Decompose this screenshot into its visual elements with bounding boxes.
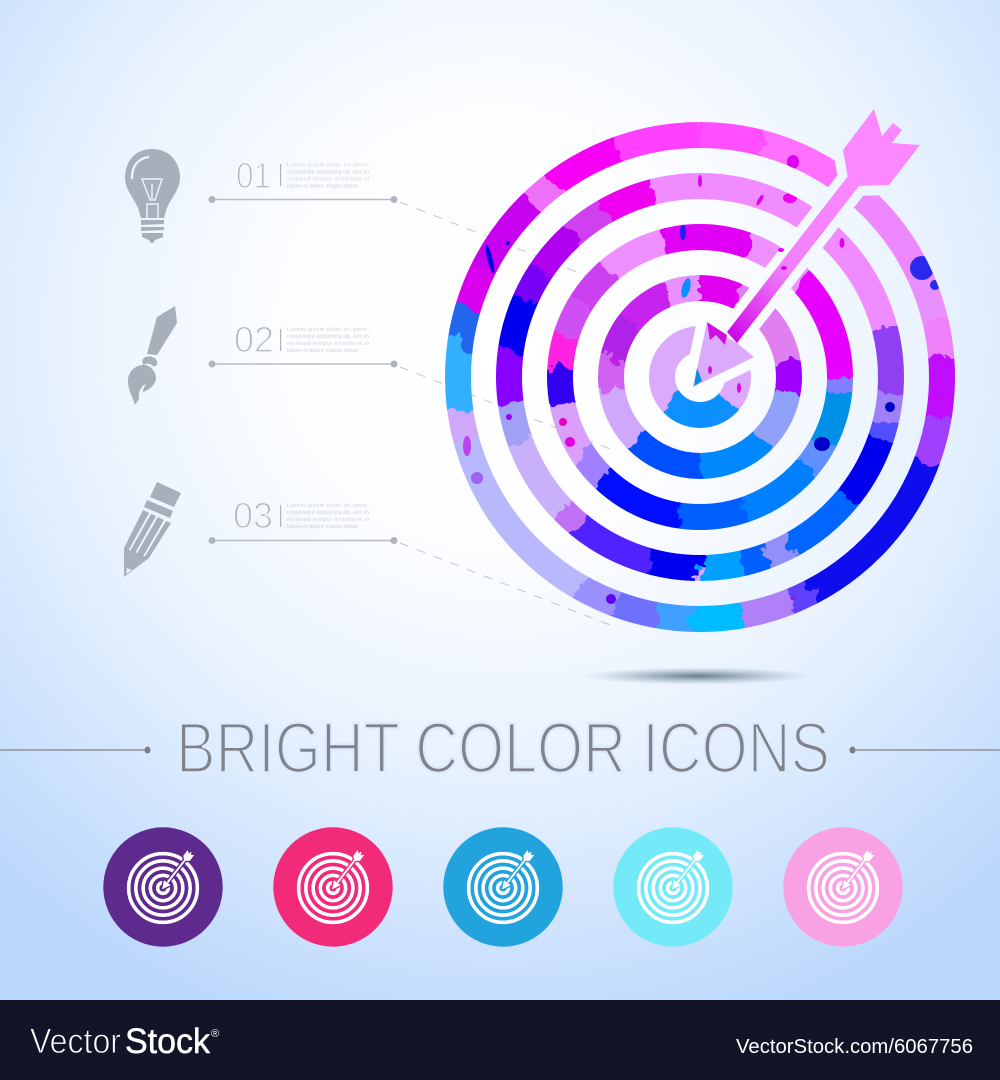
icon: pink badge xyxy=(273,827,393,947)
footer bar xyxy=(0,1000,1000,1080)
connector 02 xyxy=(208,360,613,450)
ground shadow xyxy=(580,667,816,685)
icon: paint brush xyxy=(128,306,177,405)
footer logo xyxy=(30,1022,219,1061)
target rings with paint splashes xyxy=(440,110,960,640)
arrow fletching xyxy=(843,109,920,186)
footer logo: Vector xyxy=(30,1022,121,1061)
number 03 with text: eiusmod tempor incididunt ut xyxy=(287,517,369,523)
number 03 with text: consectetur adipisicing elit, sed do xyxy=(287,510,369,516)
icon: pencil xyxy=(124,482,181,577)
number 02 with text: labore et dolore magna aliqua. xyxy=(287,348,359,354)
paint splatter xyxy=(461,155,940,604)
connector 01 xyxy=(208,196,612,286)
heading rule left xyxy=(0,746,150,754)
number 03 with text: 03 xyxy=(233,495,273,536)
icon variants row xyxy=(103,827,903,947)
footer logo: ® xyxy=(211,1028,219,1040)
arrow head xyxy=(693,322,754,387)
number 02 with text: Lorem ipsum dolor sit amet, xyxy=(287,327,369,333)
number 01 with text: Lorem ipsum dolor sit amet, xyxy=(287,162,369,168)
icon: light pink badge xyxy=(783,827,903,947)
icon: light bulb xyxy=(125,149,180,243)
icon: cyan badge xyxy=(613,827,733,947)
number 03 with text: labore et dolore magna aliqua. xyxy=(287,524,359,530)
number 01 with text xyxy=(236,155,369,196)
connector 03 xyxy=(208,537,615,627)
number 02 with text xyxy=(234,319,369,360)
number 02 with text: eiusmod tempor incididunt ut xyxy=(287,341,369,347)
number 01 with text: consectetur adipisicing elit, sed do xyxy=(287,170,369,176)
heading rule right xyxy=(850,746,1000,754)
number 01 with text: 01 xyxy=(236,155,271,196)
connector lines xyxy=(208,196,615,627)
footer id: VectorStock.com/6067756 xyxy=(736,1036,973,1058)
heading: BRIGHT COLOR ICONS xyxy=(176,708,830,788)
number 01 with text: labore et dolore magna aliqua. xyxy=(287,184,359,190)
number 03 with text: Lorem ipsum dolor sit amet, xyxy=(287,503,369,509)
number 01 with text: eiusmod tempor incididunt ut xyxy=(287,176,369,182)
icon: purple badge xyxy=(103,827,223,947)
number 02 with text: consectetur adipisicing elit, sed do xyxy=(287,334,369,340)
arrow shaft xyxy=(727,176,859,343)
footer logo: Stock xyxy=(125,1022,210,1061)
main target icon xyxy=(440,109,960,640)
icon: blue badge xyxy=(443,827,563,947)
number 03 with text xyxy=(233,495,369,536)
arrow xyxy=(693,109,920,387)
number 02 with text: 02 xyxy=(234,319,274,360)
